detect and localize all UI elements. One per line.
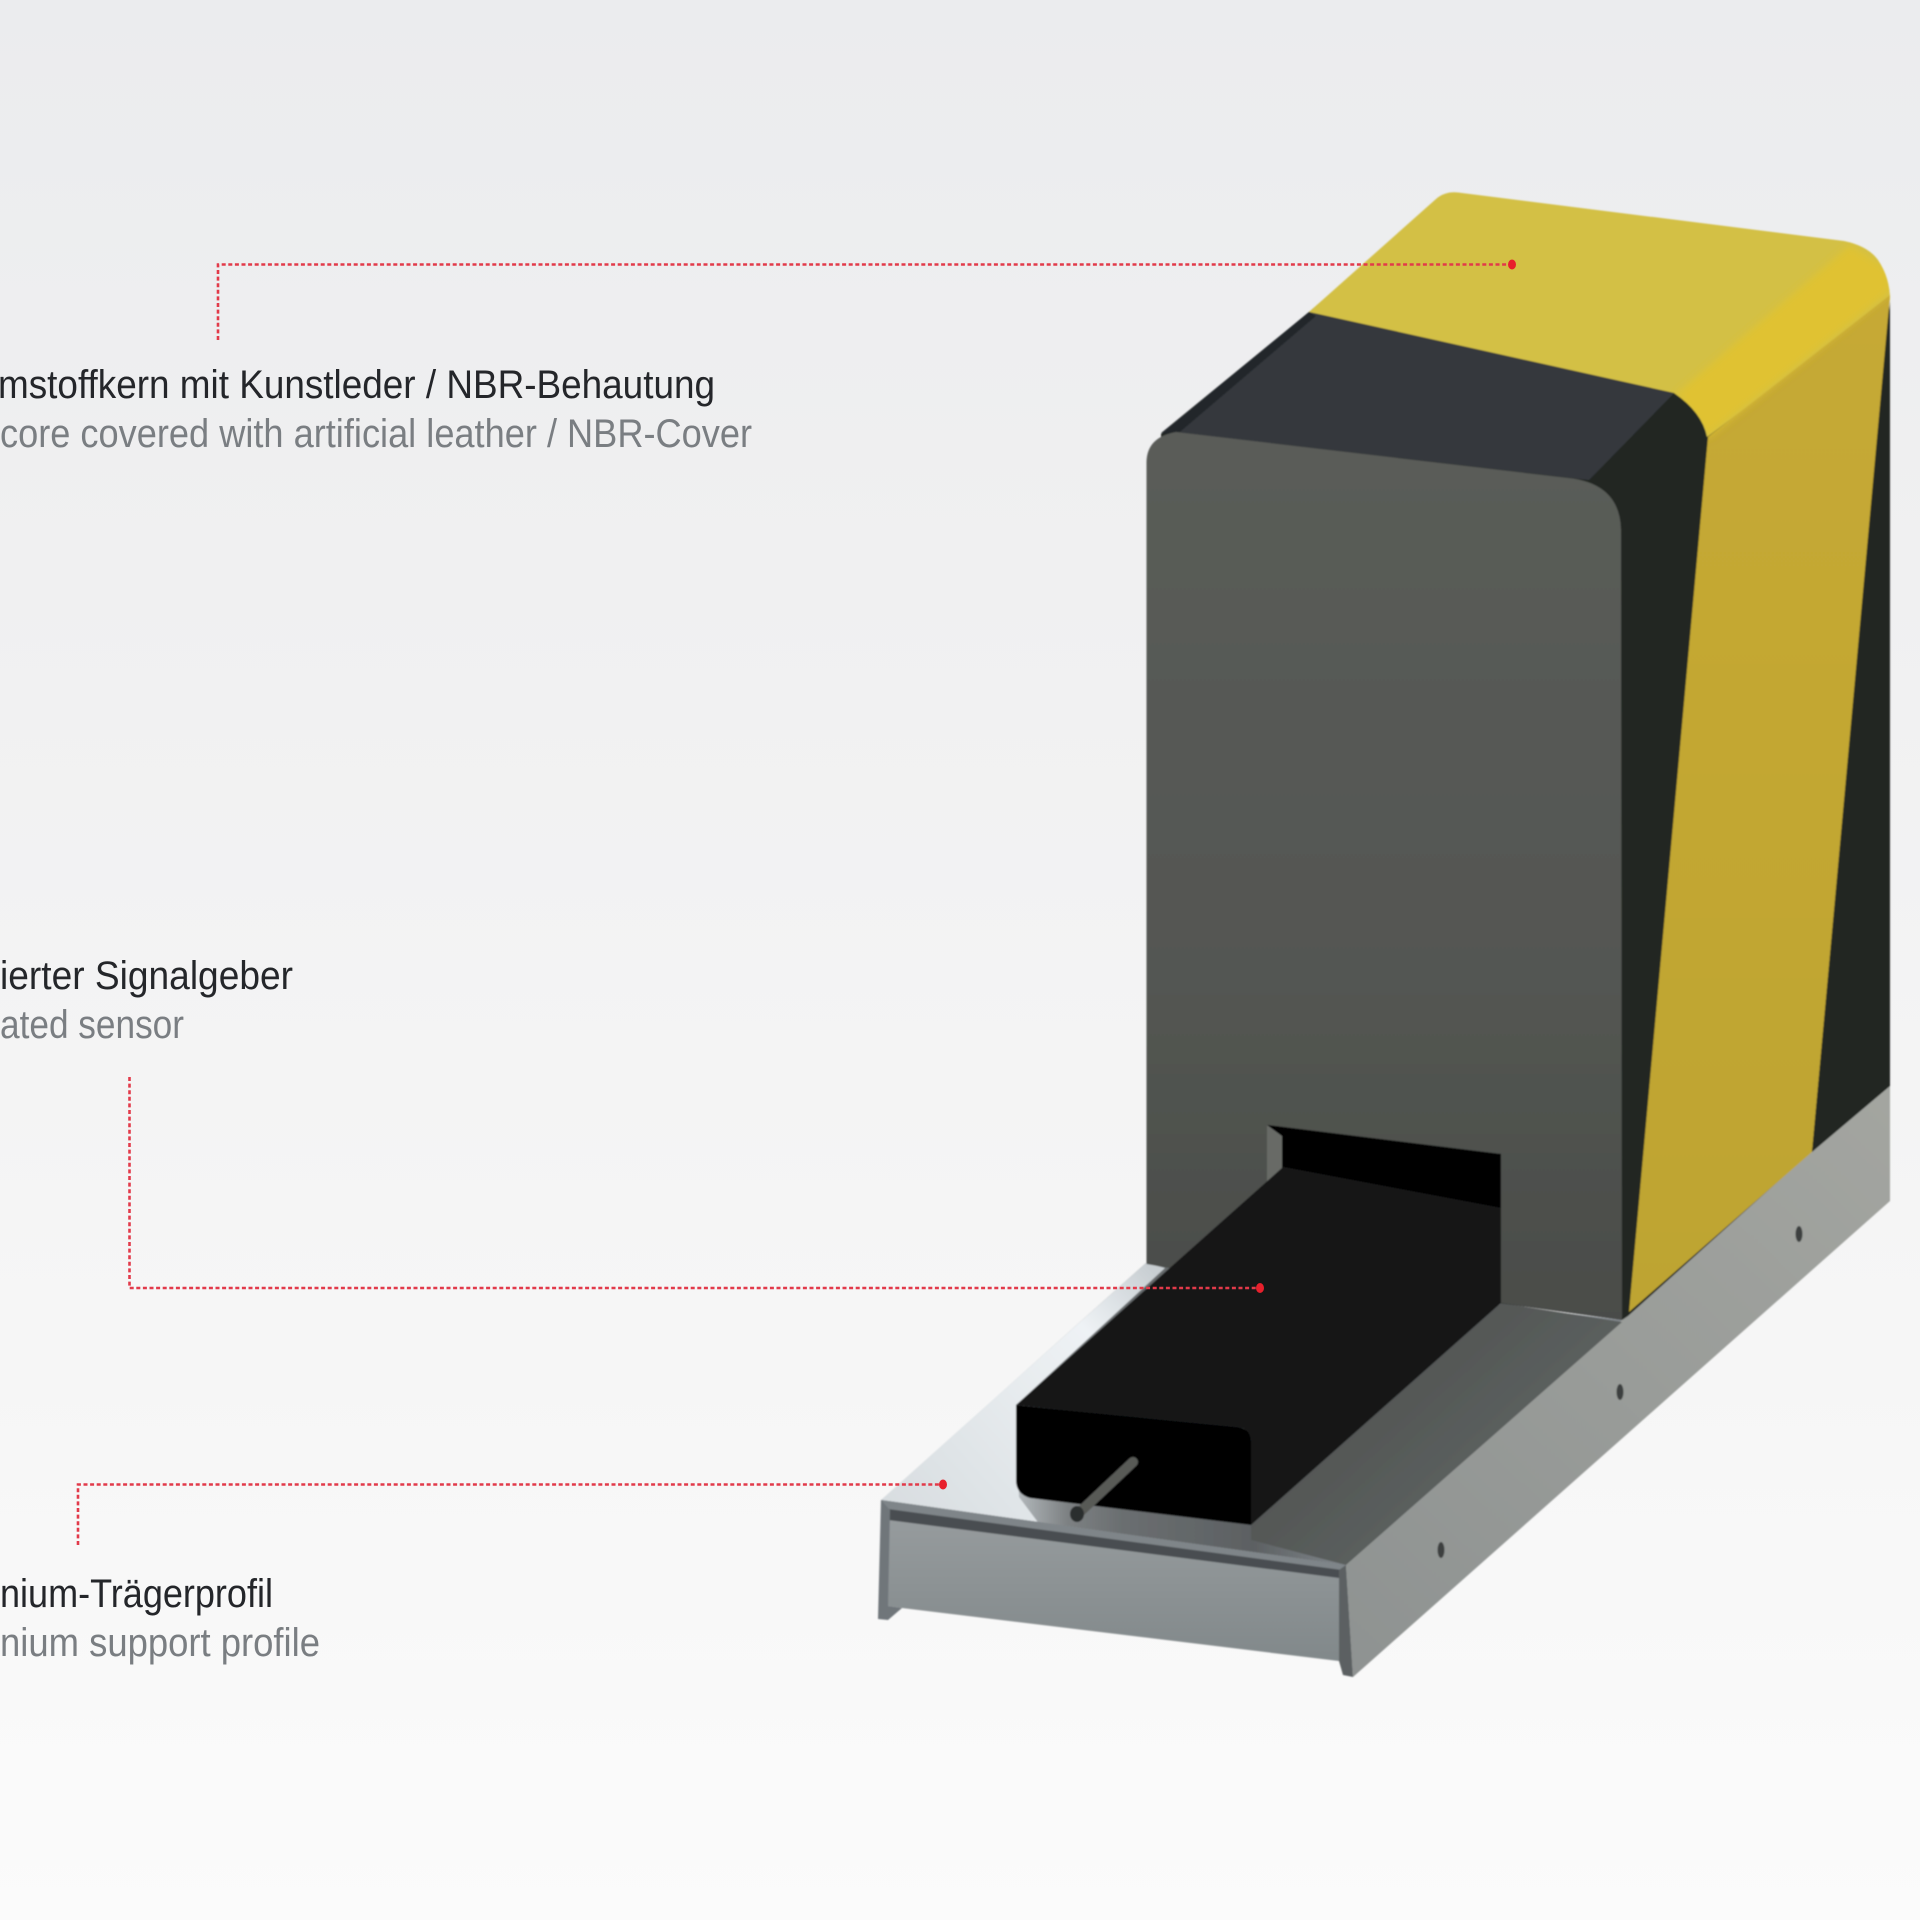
label: aluminium profile: nium-Trägerprofil (0, 1572, 273, 1616)
leader line: sensor callout (130, 1077, 1264, 1293)
profile front top lip (881, 1500, 1346, 1578)
sensor: front face (1016, 1405, 1251, 1525)
opening inner wall (1267, 1125, 1282, 1183)
label: foam core (0, 363, 752, 456)
foam shell: yellow rounded bevel (1676, 245, 1890, 437)
foam shell: black left bevel (1161, 312, 1316, 434)
label: aluminium profile: nium support profile (0, 1621, 320, 1665)
leader line: aluminium profile callout (78, 1480, 947, 1545)
foam shell: black rear stripe (1812, 300, 1890, 1152)
leader line: foam core callout (218, 260, 1516, 340)
profile front left flange (878, 1500, 902, 1620)
opening interior shadow (1282, 1136, 1501, 1210)
foam core: grey end face (1146, 432, 1622, 1320)
sensor: top face (1016, 1167, 1501, 1437)
label: integrated sensor: ated sensor (0, 1003, 184, 1047)
foam shell: yellow side stripe (1629, 295, 1890, 1312)
profile front panel (888, 1518, 1339, 1661)
rectangular black opening in the foam (1267, 1125, 1501, 1300)
aluminium profile side wall (1346, 1086, 1890, 1677)
front lip highlight (881, 1500, 1346, 1570)
label: foam core: core covered with artificial leather / NBR-Cover (0, 412, 752, 456)
label: foam core: mstoffkern mit Kunstleder / NBR-Behautung (0, 363, 715, 407)
aluminium profile top plate (881, 1263, 1622, 1565)
label: integrated sensor: ierter Signalgeber (0, 954, 293, 998)
dark silhouette behind the foam shell (1161, 194, 1890, 1320)
label: aluminium profile (0, 1572, 320, 1665)
mounting holes (1438, 1226, 1802, 1558)
label: integrated sensor (0, 954, 293, 1047)
sensor: right side (1243, 1215, 1501, 1525)
sensor cable (1070, 1462, 1133, 1522)
plate deck beside sensor (1251, 1303, 1622, 1565)
product illustration: signal strip on aluminium profile (878, 192, 1890, 1677)
bright left plate strip (881, 1263, 1165, 1525)
foam shell: black top (1161, 312, 1674, 480)
profile front right flange (1339, 1565, 1353, 1677)
foam shell: yellow top (1309, 192, 1890, 437)
